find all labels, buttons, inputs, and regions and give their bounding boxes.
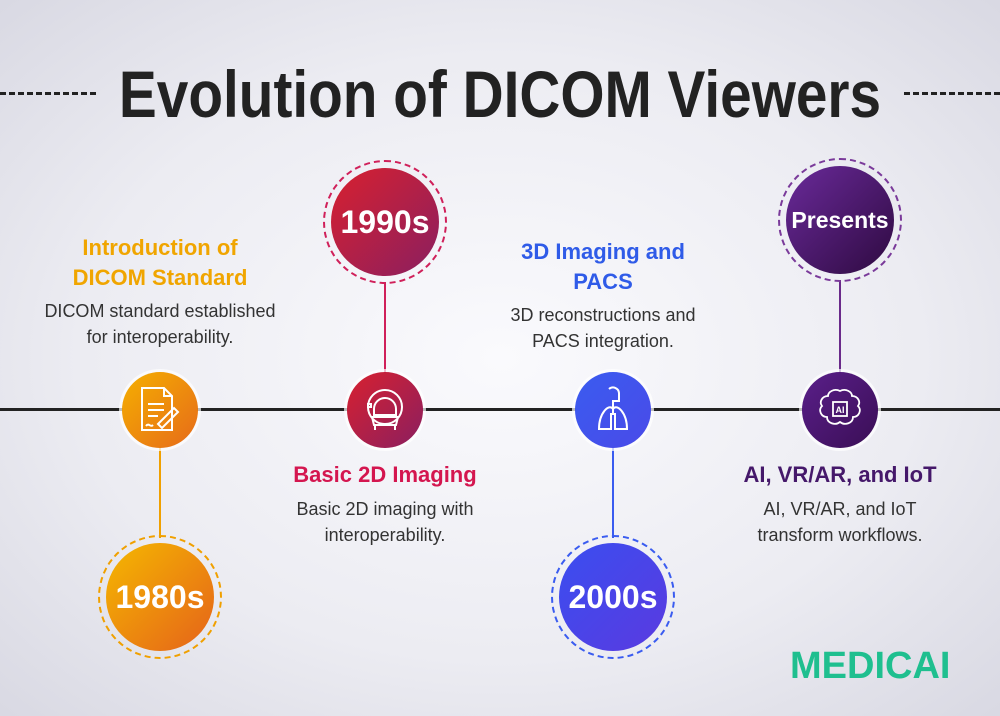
badge presents: Presents: [791, 206, 889, 232]
badge 2000s: 2000s: [568, 578, 657, 614]
logo: MEDICAI: [790, 645, 950, 687]
icon: lungs: [575, 372, 651, 448]
text block presents: [743, 462, 937, 545]
timeline: [0, 408, 1000, 411]
badge 2000s: [559, 543, 667, 651]
connector 1980s: [159, 448, 161, 538]
badge 1980s: [106, 543, 214, 651]
ring 1990s: [323, 160, 447, 284]
dashed line right: [904, 92, 1000, 95]
text block 2000s: 3D reconstructions and: [510, 305, 696, 325]
text block 1990s: Basic 2D Imaging: [293, 462, 477, 487]
text block 2000s: PACS: [573, 269, 633, 294]
icon: MRI scanner: [347, 372, 423, 448]
text block 1990s: Basic 2D imaging with: [296, 499, 474, 519]
badge presents: [786, 166, 894, 274]
text block 1980s: for interoperability.: [87, 327, 233, 347]
text block 1980s: DICOM Standard: [73, 265, 247, 290]
connector 1990s: [384, 282, 386, 374]
text block 1990s: interoperability.: [325, 525, 445, 545]
text block presents: AI, VR/AR, and IoT: [763, 499, 917, 519]
text block 1980s: [44, 235, 276, 347]
badge 1990s: 1990s: [340, 204, 429, 240]
title: Evolution of DICOM Viewers: [119, 57, 881, 131]
text block 1980s: DICOM standard established: [44, 301, 276, 321]
connector 2000s: [612, 448, 614, 538]
badge 1990s: [331, 168, 439, 276]
ring presents: [778, 158, 902, 282]
text block presents: transform workflows.: [757, 525, 923, 545]
text block 2000s: [510, 239, 696, 351]
text block 1980s: Introduction of: [82, 235, 238, 260]
ring 2000s: [551, 535, 675, 659]
badge 1980s: 1980s: [116, 578, 204, 614]
connector presents: [839, 280, 841, 372]
icon: AI brain: [802, 372, 878, 448]
text block 1990s: [293, 462, 477, 545]
text block 2000s: 3D Imaging and: [521, 239, 685, 264]
icon: AI brain: AI: [836, 405, 844, 415]
text block presents: AI, VR/AR, and IoT: [743, 462, 937, 487]
ring 1980s: [98, 535, 222, 659]
dashed line left: [0, 92, 96, 95]
text block 2000s: PACS integration.: [532, 331, 674, 351]
icon: document: [122, 372, 198, 448]
